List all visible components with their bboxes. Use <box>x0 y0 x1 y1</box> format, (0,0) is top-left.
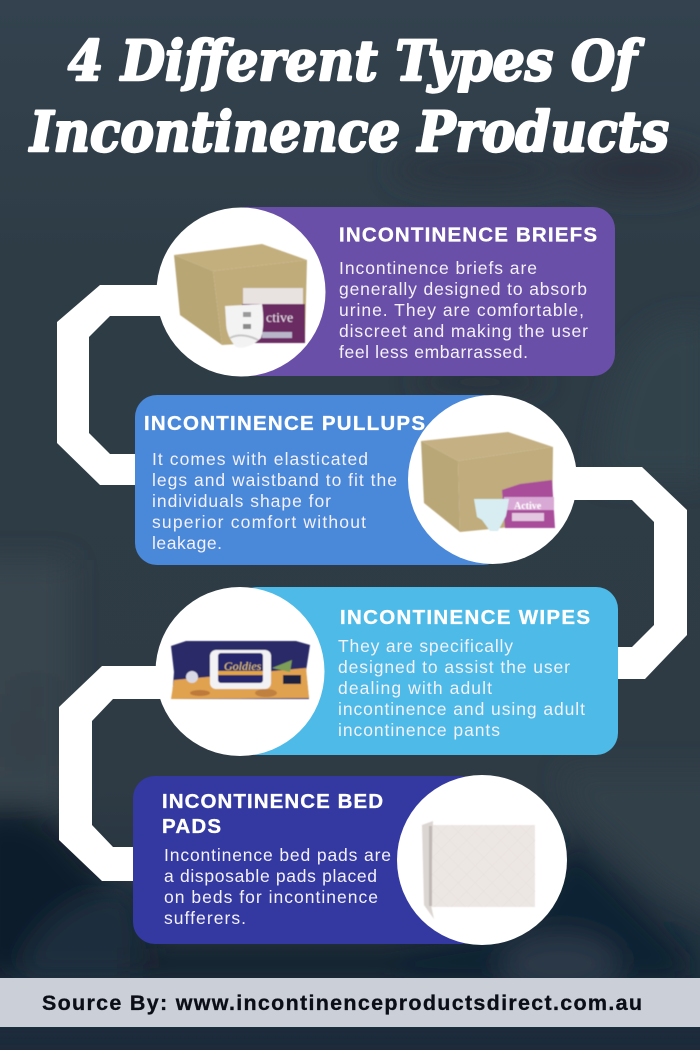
icon: wipes pack <box>171 641 310 699</box>
text block: wipes: incontinence pants <box>338 720 500 740</box>
text block: bed pads <box>164 845 391 928</box>
source bar: Source By: www.incontinenceproductsdirect.com.au <box>42 991 642 1015</box>
connector: pullups to wipes <box>560 467 687 679</box>
text block: briefs: urine. They are comfortable, <box>339 300 584 320</box>
text block: pullups <box>152 449 397 553</box>
text block: bed pads: a disposable pads placed <box>164 866 377 886</box>
title: 4 Different Types Of <box>68 28 645 93</box>
heading: wipes: INCONTINENCE WIPES <box>340 606 590 629</box>
text block: pullups: individuals shape for <box>152 491 331 511</box>
text block: pullups: It comes with elasticated <box>152 449 368 469</box>
text block: briefs: discreet and making the user <box>339 321 588 341</box>
icon: wipes pack: Goldies <box>224 659 262 673</box>
panel: incontinence pullups <box>135 395 577 565</box>
text block: briefs: generally designed to absorb <box>339 279 587 299</box>
text block: bed pads: on beds for incontinence <box>164 887 378 907</box>
title <box>28 28 669 164</box>
text block: bed pads: sufferers. <box>164 908 246 928</box>
panel background <box>235 587 618 755</box>
text block: pullups: leakage. <box>152 533 222 553</box>
icon: carton and pullups pack: Active <box>514 501 542 512</box>
text block: wipes: designed to assist the user <box>338 657 570 677</box>
panel: incontinence wipes <box>156 587 618 756</box>
icon: carton and briefs pack <box>174 244 307 348</box>
icon: carton and pullups pack <box>421 432 555 532</box>
icon: pullups circle <box>408 395 577 564</box>
icon: bed pad <box>422 821 535 919</box>
panel background <box>133 776 483 944</box>
text block: briefs: Incontinence briefs are <box>339 258 537 278</box>
text block: wipes <box>338 636 585 740</box>
panel background <box>225 207 615 376</box>
text block: wipes: They are specifically <box>338 636 513 656</box>
panel: incontinence briefs <box>156 207 615 376</box>
text block: bed pads: Incontinence bed pads are <box>164 845 391 865</box>
connector: wipes to bed pads <box>59 666 170 881</box>
icon: briefs circle <box>156 208 326 376</box>
text block: wipes: dealing with adult <box>338 678 492 698</box>
source bar <box>0 978 700 1027</box>
text block: briefs <box>339 258 588 362</box>
text block: pullups: superior comfort without <box>152 512 366 532</box>
heading: bed pads: PADS <box>162 815 221 838</box>
icon: carton and briefs pack: ctive <box>266 311 293 326</box>
connector: briefs to pullups <box>57 285 170 485</box>
panel: incontinence bed pads <box>133 775 567 945</box>
text block: pullups: legs and waistband to fit the <box>152 470 397 490</box>
heading: pullups: INCONTINENCE PULLUPS <box>144 412 425 435</box>
icon: wipes circle <box>156 587 324 756</box>
icon: bed pad circle <box>397 775 567 945</box>
text block: wipes: incontinence and using adult <box>338 699 585 719</box>
heading: bed pads: INCONTINENCE BED <box>162 790 383 813</box>
panel background <box>135 395 505 565</box>
text block: briefs: feel less embarrassed. <box>339 342 528 362</box>
heading: briefs: INCONTINENCE BRIEFS <box>339 224 597 246</box>
heading: bed pads <box>162 790 383 838</box>
